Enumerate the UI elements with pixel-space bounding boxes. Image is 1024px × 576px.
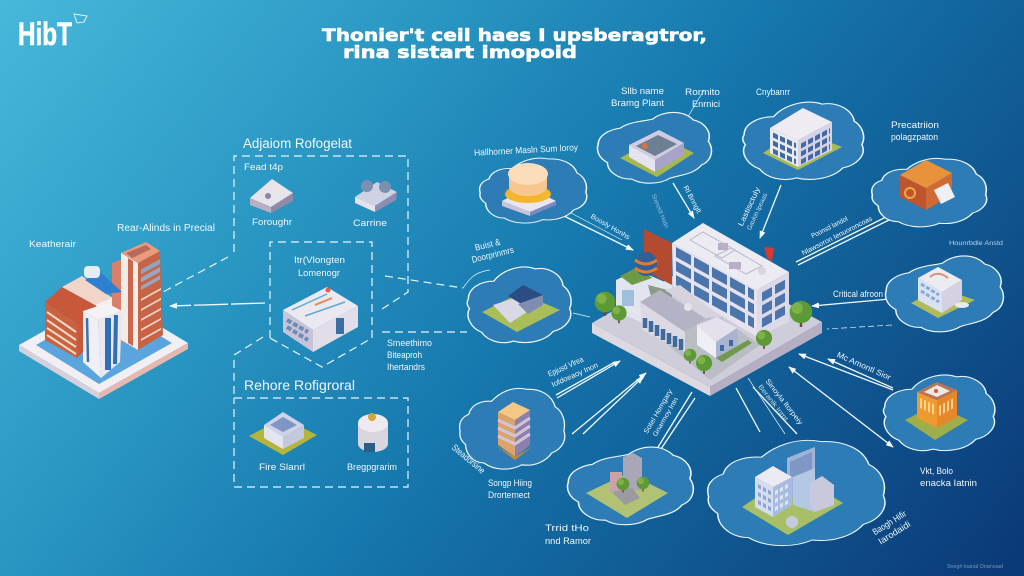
icon: orange building: [905, 382, 968, 440]
base plate: [592, 258, 822, 396]
label: Lomenogr: [298, 268, 340, 278]
right annex: [697, 317, 738, 358]
label: Srenoldt Hodn: [650, 193, 669, 229]
note: Biteaproh: [387, 350, 422, 360]
panel: main central building: [592, 223, 822, 396]
icon: tower with trees: [586, 453, 668, 518]
label: [545, 523, 591, 546]
label: Hallhorner Masln Sum loroy: [474, 142, 579, 158]
label: Lastisctuly: [736, 185, 762, 228]
label: Keatherair: Keatherair: [29, 239, 76, 249]
logo: HibT: [18, 16, 72, 52]
sublabel: Fead t4p: [244, 162, 283, 173]
icon: office block: [763, 108, 842, 170]
icon: cylinder tank: [358, 413, 388, 452]
title: [322, 26, 707, 63]
label: Hounrbdle Anstd: [949, 240, 1003, 247]
label: Rl Bnnglt: [682, 185, 702, 215]
label: Beranlk Inmt: [756, 384, 789, 423]
label: [736, 185, 770, 231]
label: polagzpaton: [891, 132, 938, 142]
panel: cloud 10 blue house: [467, 234, 571, 343]
label: Songp Hiing: [488, 478, 532, 488]
label: [891, 120, 939, 142]
label: [685, 87, 720, 109]
panel: cloud 5 right middle: [833, 240, 1003, 332]
label: [488, 478, 532, 500]
panel: cloud 1 hall main: [474, 142, 587, 223]
label: Foroughr: [252, 217, 292, 227]
panel: cloud 9 striped tower: [450, 388, 565, 500]
label: [546, 350, 599, 389]
label: Steadorsine: [450, 442, 487, 476]
heading: Adjaiom Rofogelat: [243, 136, 352, 151]
label: Sinoyla ltorpeiy: [764, 378, 804, 427]
label: Critical afroon: [833, 289, 883, 299]
label: Gaukin tpeaas: [746, 192, 770, 231]
arrows around the main building: [463, 90, 893, 452]
label: Sllb name: [621, 86, 664, 96]
main block: [672, 223, 789, 337]
label: Mc Amontl Sior: [836, 350, 893, 382]
dashed connectors and group frames: [163, 156, 467, 487]
front red block: [45, 276, 112, 358]
blue roof and equipment: [84, 266, 122, 294]
note: [387, 338, 432, 372]
label: [871, 508, 914, 546]
note: Smeethimo: [387, 338, 432, 348]
rear tower: [112, 242, 163, 350]
label: Drorternect: [488, 490, 530, 500]
label: Fire Slanrl: [259, 462, 305, 472]
label: Iarodaidi: [876, 519, 912, 546]
label: [920, 466, 977, 488]
label: nnd Ramor: [545, 536, 591, 546]
label: Cnybanrr: [756, 87, 790, 97]
rotated arrow labels: [546, 185, 893, 440]
icon: map-top building: [283, 287, 358, 352]
icon: campus: [742, 447, 843, 535]
label: Baogh Hifir: [871, 508, 908, 537]
label: Vkt, Bolo: [920, 466, 953, 476]
label: [756, 378, 804, 432]
label: [468, 234, 515, 265]
panel: cloud 7 big campus: [708, 440, 914, 546]
label: Carrine: [353, 218, 387, 228]
label: enacka Iatnin: [920, 478, 977, 488]
label: Rormito: [685, 87, 720, 97]
label: Trrid tHo: [545, 523, 589, 533]
icon: flat box building: [250, 179, 293, 213]
label: Bregpgrarim: [347, 462, 397, 472]
icon: plant building: [249, 412, 317, 455]
green path: [716, 340, 752, 362]
title: Thonier't ceil haes I upsberagtror,: [322, 26, 707, 46]
note: Ihertandrs: [387, 362, 425, 372]
label: Buist &: [474, 237, 501, 253]
panel: remote group: [244, 377, 397, 472]
panel: cloud 4 orange box: [872, 120, 987, 227]
label: Poonsd Iandol: [810, 216, 849, 240]
label: Rear-Alinds in Precial: Rear-Alinds in Precial: [117, 223, 215, 234]
white blue block: [83, 303, 122, 378]
panel: hexagon center: [283, 255, 432, 372]
panel: cloud 2 sub plant: [597, 86, 720, 183]
label: [611, 86, 665, 108]
label: Enrnici: [692, 99, 720, 109]
label: Sotel Homgary: [643, 388, 674, 435]
label: Epjusd Vlrea: [547, 355, 585, 379]
icon: small house: [911, 267, 975, 318]
panel: cloud 6 orange building: [884, 375, 995, 488]
title: rina sistart imopoid: [343, 43, 577, 63]
roof flag: [764, 247, 774, 262]
label: Precatriion: [891, 120, 939, 130]
icon: blue roof house: [482, 285, 560, 332]
icon: round tank on block: [502, 163, 556, 216]
red wall: [644, 229, 672, 285]
icon: rooftop building: [355, 180, 397, 212]
label: [643, 388, 682, 440]
icon: orange cube: [900, 160, 955, 210]
label: Iofdoeaoy Inon: [550, 360, 599, 389]
panel: cloud 8 tower on green: [545, 447, 693, 546]
front hall: [640, 285, 722, 352]
rooftop drum: [635, 252, 657, 276]
left annex: [616, 266, 672, 322]
panel: adjacent group: [243, 136, 397, 228]
label: Itr(Vlongten: [294, 255, 345, 265]
panel: cloud 3 company: [743, 87, 864, 180]
base plate: [19, 295, 188, 399]
label: Doorprinmrs: [471, 245, 515, 265]
label: Nlawsoron Ienuoroncoas: [801, 215, 874, 257]
heading: Rehore Rofigroral: [244, 377, 355, 393]
panel: left source building: [19, 223, 215, 399]
trees: [595, 292, 812, 374]
label: Gnarmoy lntn: [652, 396, 680, 438]
icon: striped tower: [496, 402, 533, 460]
label: Boosly Honhs: [589, 213, 631, 242]
footer note: Snegh loanal Onarvoad: [947, 564, 1003, 570]
icon: open roof building: [620, 130, 694, 177]
label: Bramg Plant: [611, 98, 665, 108]
